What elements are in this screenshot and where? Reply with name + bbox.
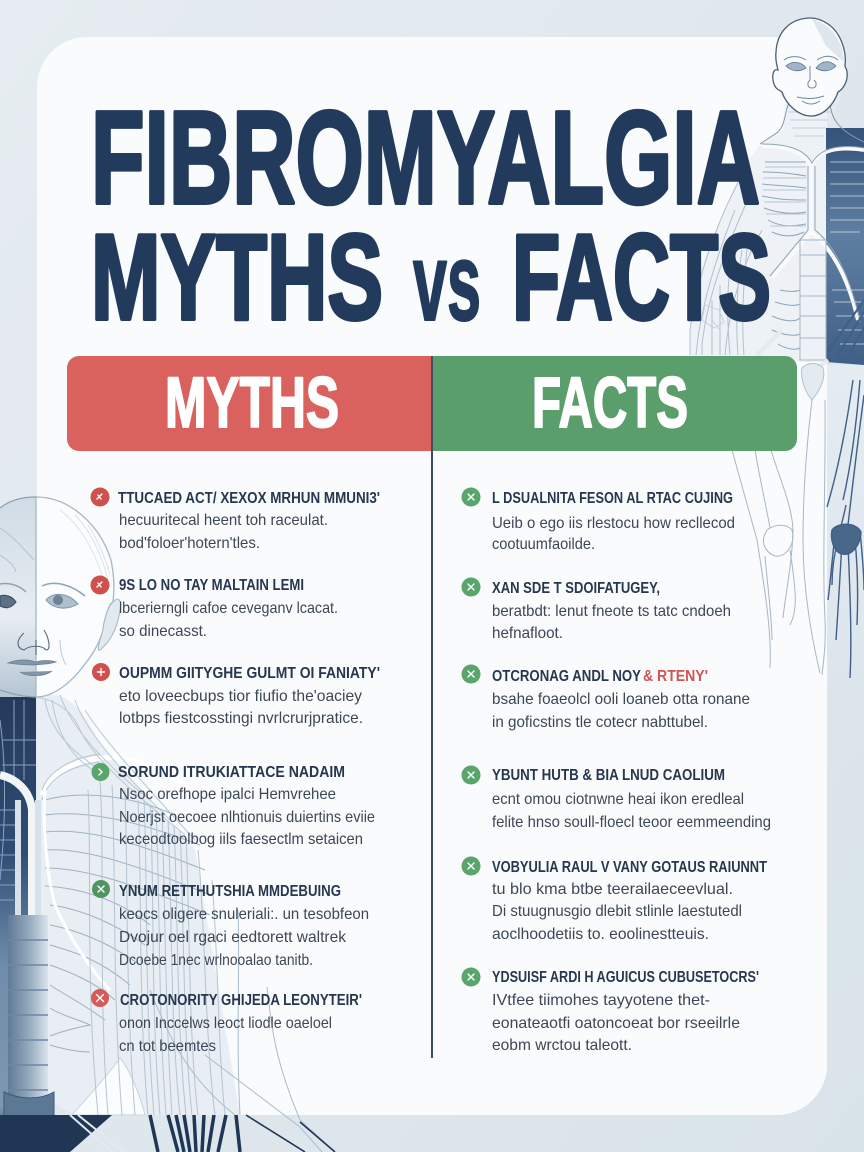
myth 4: SORUND ITRUKIATTACE NADAIM <box>118 764 345 781</box>
dark right leg <box>827 380 864 678</box>
lower legs <box>732 400 825 675</box>
myth 1 <box>90 488 380 552</box>
fact 2: beratbdt: lenut fneote ts tatc cndoeh <box>492 603 731 620</box>
icon: green cross marker <box>462 968 480 986</box>
fact 4: YBUNT HUTB & BIA LNUD CAOLIUM <box>492 767 725 784</box>
panel: myths header: MYTHS <box>165 364 339 443</box>
fact 6: YDSUISF ARDI H AGUICUS CUBUSETOCRS' <box>492 969 759 986</box>
fact 3: in goficstins tle cotecr nabttubel. <box>492 714 708 731</box>
myth 1: hecuuritecal heent toh raceulat. <box>119 512 328 529</box>
fact 5: tu blo kma btbe teerailaeceevlual. <box>492 881 733 898</box>
icon: red plus marker <box>92 663 110 681</box>
fact 3: OTCRONAG ANDL NOY <box>492 668 641 685</box>
title <box>91 84 771 345</box>
myth 5: keocs oligere snuleriali:. un tesobfeon <box>119 906 369 923</box>
fact 2 <box>462 578 731 642</box>
icon: red cross marker <box>91 989 109 1007</box>
fact 5: VOBYULIA RAUL V VANY GOTAUS RAIUNNT <box>492 859 767 876</box>
illustration: anatomical figure bottom left <box>0 690 335 1152</box>
title line 2: myths: MYTHS <box>91 209 383 345</box>
illustration: head of top right figure <box>773 18 847 116</box>
icon: green marker <box>92 763 110 781</box>
title line 2: vs: vs <box>413 221 481 344</box>
fact 2: hefnafloot. <box>492 625 563 642</box>
spine column <box>8 915 48 1100</box>
fact 1: cootuumfaoilde. <box>492 536 595 553</box>
fact 4 <box>462 766 771 831</box>
fact 2: XAN SDE T SDOIFATUGEY, <box>492 580 660 597</box>
fact 1 <box>462 488 735 553</box>
myth 5 <box>92 880 369 969</box>
panel: facts header <box>432 356 797 451</box>
icon: green cross marker <box>462 856 480 876</box>
myth 2: so dinecasst. <box>119 623 207 640</box>
fact 6 <box>462 968 759 1054</box>
panel: facts header: FACTS <box>532 364 688 443</box>
fact 5: aoclhoodetiis to. eoolinestteuis. <box>492 926 709 943</box>
myth 4: Noerjst oecoee nlhtionuis duiertins eviie <box>119 809 375 826</box>
icon: green cross marker <box>462 488 480 506</box>
myth 3: lotbps fiestcosstingi nvrlcrurjpratice. <box>119 710 363 727</box>
fact 5 <box>462 856 767 943</box>
illustration: anatomical figure top right <box>690 18 864 690</box>
icon: green cross marker <box>462 578 480 596</box>
myth 2: lbcerierngli cafoe ceveganv lcacat. <box>119 600 338 617</box>
fact 6: IVtfee tiimohes tayyotene thet- <box>492 992 710 1009</box>
myth 6: onon Inccelws leoct liodle oaeloel <box>119 1015 332 1032</box>
icon: green cross marker <box>462 766 480 784</box>
myth 4 <box>92 763 375 848</box>
myth 3 <box>92 663 380 727</box>
myth 4: Nsoc orefhope ipalci Hemvrehee <box>119 786 336 803</box>
myth 1: bod'foloer'hotern'tles. <box>119 535 260 552</box>
fact 3: & RTENY' <box>643 668 708 685</box>
icon: green cross marker <box>92 880 110 898</box>
illustration: head of bottom left figure <box>0 497 121 697</box>
figure lower edge below the card <box>0 1115 112 1152</box>
myth 5: Dcoebe 1nec wrlnooalao tanitb. <box>119 952 313 969</box>
myth 2: 9S LO NO TAY MALTAIN LEMI <box>119 577 304 594</box>
fact 4: ecnt omou ciotnwne heai ikon eredleal <box>492 791 744 808</box>
fact 6: eonateaotfi oatoncoeat bor rseeilrle <box>492 1015 740 1032</box>
fact 1: L DSUALNITA FESON AL RTAC CUJING <box>492 490 733 507</box>
panel: myths list <box>90 488 380 1055</box>
fact 1: Ueib o ego iis rlestocu how recllecod <box>492 515 735 532</box>
panel: myths header <box>67 356 432 451</box>
icon: red marker <box>90 488 110 506</box>
myth 5: YNUM RETTHUTSHIA MMDEBUING <box>119 883 341 900</box>
myth 6: cn tot beemtes <box>119 1038 216 1055</box>
fact 5: Di stuugnusgio dlebit stlinle laestutedl <box>492 903 742 920</box>
icon: green cross marker <box>462 664 480 684</box>
myth 3: OUPMM GIITYGHE GULMT OI FANIATY' <box>119 665 380 682</box>
icon: red marker <box>90 576 110 594</box>
myth 3: eto loveecbups tior fiufio the'oaciey <box>119 688 362 705</box>
fact 6: eobm wrctou taleott. <box>492 1037 632 1054</box>
myth 5: Dvojur oel rgaci eedtorett waltrek <box>119 929 347 946</box>
fact 3 <box>462 664 750 731</box>
fact 3: bsahe foaeolcl ooli loaneb otta ronane <box>492 691 750 708</box>
myth 6: CROTONORITY GHIJEDA LEONYTEIR' <box>120 992 362 1009</box>
myth 4: keceodtoolbog iils faesectlm setaicen <box>119 831 363 848</box>
myth 2 <box>90 576 338 640</box>
myth 6 <box>91 989 362 1055</box>
myth 1: TTUCAED ACT/ XEXOX MRHUN MMUNI3' <box>118 490 380 507</box>
panel: facts list <box>462 488 771 1054</box>
fact 4: felite hnso soull-floecl teoor eemmeending <box>492 814 771 831</box>
